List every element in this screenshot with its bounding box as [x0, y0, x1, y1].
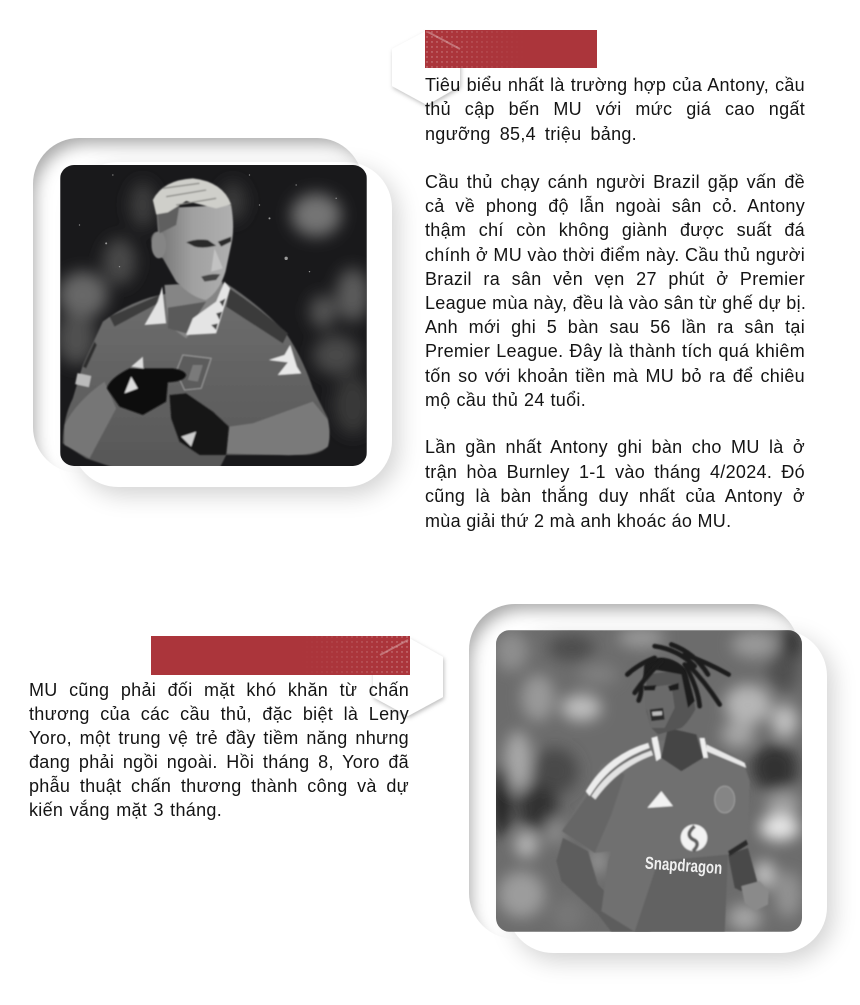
text block: Antony: trận hòa Burnley 1-1 vào tháng 4/2024. Đó: [425, 462, 805, 482]
jersey: [562, 736, 750, 932]
text block: Yoro: kiến vắng mặt 3 tháng.: [29, 800, 222, 820]
text block: Antony: Lần gần nhất Antony ghi bàn cho MU là ở: [425, 437, 805, 457]
hexagon overlap edge: [380, 640, 408, 655]
panel: Antony photo frame: [33, 138, 408, 505]
inset rim: [33, 138, 363, 473]
text block: Antony: [425, 75, 806, 531]
text block: Antony: Cầu thủ chạy cánh người Brazil gặp vấn đề: [425, 172, 805, 192]
text block: Antony: chính ở MU vào thời điểm này. Cầu thủ người: [425, 245, 805, 265]
red bar: [151, 636, 410, 675]
text block: Antony: Brazil ra sân vẻn vẹn 27 phút ở Premier: [425, 269, 805, 289]
panel: Yoro photo frame: [469, 604, 843, 971]
back card: [72, 162, 392, 487]
text block: Antony: cả về phong độ lẫn ngoài sân cỏ. Antony: [425, 196, 805, 216]
text block: Yoro: phẫu thuật chấn thương thành công và dự: [29, 776, 409, 796]
text block: Yoro: đang phải ngồi ngoài. Hồi tháng 8, Yoro đã: [29, 752, 409, 772]
text block: Antony: cũng là bàn thắng duy nhất của Antony ở: [425, 486, 805, 506]
text block: Antony: ngưỡng 85,4 triệu bảng.: [425, 124, 637, 144]
inset rim: [469, 604, 799, 939]
text block: Antony: thậm chí còn không giành được suất đá: [425, 220, 805, 240]
body: jersey: [63, 283, 329, 468]
banner: lower red bar with hexagon: [151, 636, 446, 720]
photo: Yoro: [496, 630, 802, 932]
text block: Yoro: thương của các cầu thủ, đặc biệt là Leny: [29, 704, 409, 724]
hexagon: [392, 31, 460, 105]
banner: top red bar with hexagon: [390, 30, 597, 108]
back card: [507, 630, 827, 953]
text block: Antony: Tiêu biểu nhất là trường hợp của Antony, cầu: [425, 75, 805, 95]
hexagon: [373, 638, 443, 716]
hair dreadlocks: [627, 644, 729, 706]
text block: Antony: Anh mới ghi 5 bàn sau 56 lần ra sân tại: [425, 317, 805, 337]
text block: Antony: Premier League. Đây là thành tích quá khiêm: [425, 341, 805, 361]
text block: Antony: League mùa này, đều là vào sân từ ghế dự bị.: [425, 293, 806, 313]
text block: Antony: mùa giải thứ 2 mà anh khoác áo MU.: [425, 511, 731, 531]
crest: [176, 355, 211, 390]
photo: Antony: [60, 165, 367, 466]
text block: Antony: mộ cầu thủ 24 tuổi.: [425, 390, 586, 410]
gloves: [107, 357, 229, 455]
text block: Yoro: Yoro, một trung vệ trẻ đầy tiềm năng nhưng: [29, 728, 409, 748]
head: [643, 658, 703, 771]
snow specks: [79, 174, 337, 272]
sponsor wordmark: Snapdragon: [644, 853, 723, 878]
head: [151, 178, 233, 300]
red bar: [425, 30, 597, 68]
text block: Yoro: [29, 680, 409, 820]
text block: Antony: tốn so với khoản tiền mà MU bỏ ra để chiêu: [425, 366, 805, 386]
neck and collar: [144, 282, 230, 338]
text block: Antony: thủ cập bến MU với mức giá cao ngất: [425, 99, 805, 119]
arms: [556, 838, 769, 932]
hexagon overlap edge: [428, 32, 460, 49]
text block: Yoro: MU cũng phải đối mặt khó khăn từ chấn: [29, 680, 409, 700]
